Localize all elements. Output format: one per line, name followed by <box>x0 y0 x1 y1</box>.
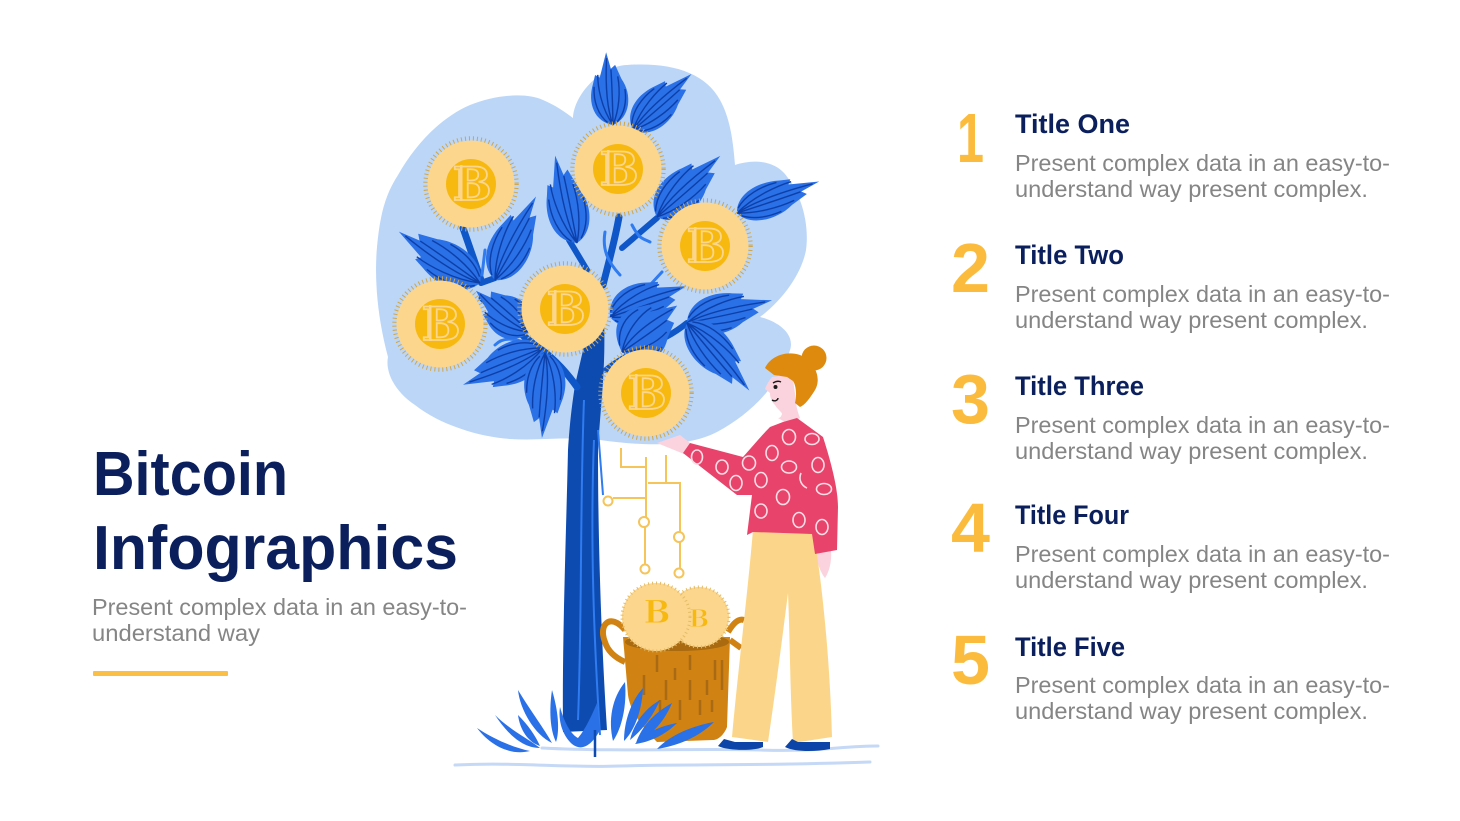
illustration: blue background blob <box>376 64 807 444</box>
shoes <box>718 739 830 751</box>
illustration: base plants <box>477 682 714 752</box>
item 1: 1 <box>957 99 984 177</box>
item 2: 2 <box>951 229 990 307</box>
subtitle text <box>92 594 467 646</box>
item 2: Title Two <box>1015 240 1124 270</box>
item 3: 3 <box>951 360 990 438</box>
hair <box>765 346 826 407</box>
basket coins <box>622 583 729 651</box>
illustration: basket with coins <box>603 583 744 742</box>
lower hand <box>815 550 831 578</box>
basket handles <box>603 620 744 662</box>
item 3 <box>951 360 1390 464</box>
item 2: understand way present complex. <box>1015 307 1368 333</box>
item 5: Title Five <box>1015 632 1125 662</box>
basket coins: B <box>689 604 709 633</box>
item 4: Title Four <box>1015 500 1129 530</box>
illustration: circuit lines <box>604 448 684 578</box>
face details <box>772 381 781 401</box>
item 4: Present complex data in an easy-to- <box>1015 541 1390 567</box>
illustration: sapling stem <box>594 730 596 757</box>
sweater pattern <box>692 430 832 534</box>
item 5 <box>951 621 1390 724</box>
item 1: Title One <box>1015 109 1130 139</box>
illustration: ground lines <box>455 746 878 766</box>
coins on tree <box>394 124 750 438</box>
item 1 <box>957 99 1390 202</box>
item 3: understand way present complex. <box>1015 438 1368 464</box>
title: Bitcoin <box>93 440 288 509</box>
branches <box>463 217 687 387</box>
leaves <box>388 51 825 439</box>
item 2: Present complex data in an easy-to- <box>1015 281 1390 307</box>
item 1: understand way present complex. <box>1015 176 1368 202</box>
item 4: understand way present complex. <box>1015 567 1368 593</box>
item 3: Title Three <box>1015 371 1144 401</box>
subtitle text: understand way <box>92 620 261 646</box>
neck and face <box>765 375 800 425</box>
illustration: tree <box>388 51 825 735</box>
basket inner shadow <box>625 633 729 651</box>
item 5: Present complex data in an easy-to- <box>1015 672 1390 698</box>
item 2 <box>951 229 1390 333</box>
trunk highlights <box>578 400 603 735</box>
item 5: 5 <box>951 621 990 699</box>
sweater <box>683 418 838 554</box>
trousers <box>732 530 832 743</box>
item 4: 4 <box>951 489 990 567</box>
item 4 <box>951 489 1390 593</box>
basket weave marks <box>644 655 722 720</box>
basket coins: B <box>643 593 671 631</box>
trunk <box>563 320 607 732</box>
item 3: Present complex data in an easy-to- <box>1015 412 1390 438</box>
item 1: Present complex data in an easy-to- <box>1015 150 1390 176</box>
basket body <box>623 637 730 742</box>
item 5: understand way present complex. <box>1015 698 1368 724</box>
accent line <box>93 671 228 676</box>
title <box>93 440 458 583</box>
hand <box>657 435 690 454</box>
illustration: woman <box>657 346 838 751</box>
title: Infographics <box>93 514 458 583</box>
subtitle text: Present complex data in an easy-to- <box>92 594 467 620</box>
